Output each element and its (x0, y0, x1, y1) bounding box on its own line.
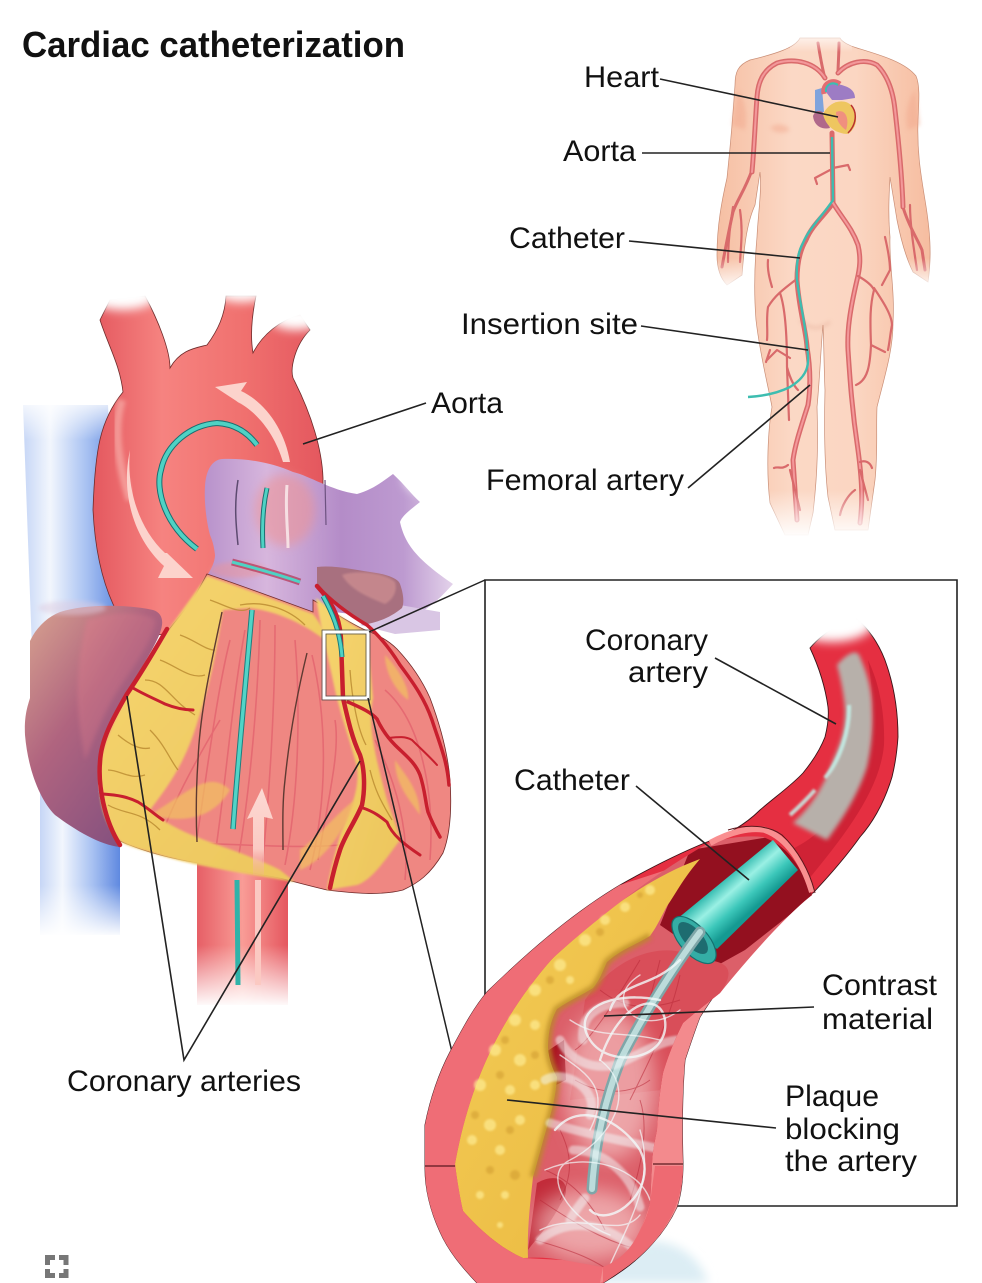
arterial tree (722, 43, 925, 523)
plaque blobs (467, 885, 655, 1228)
label: plaque: blocking (785, 1113, 900, 1146)
branch fades (88, 278, 322, 330)
near wall band (425, 859, 700, 1283)
label: contrast material: material (822, 1003, 933, 1036)
label: catheter: Catheter (509, 222, 625, 255)
icon: expand (48, 1258, 66, 1276)
body silhouette (717, 38, 930, 535)
body labels (461, 61, 684, 497)
body figure (712, 30, 935, 538)
aortic arch (93, 296, 323, 640)
arch highlight (117, 400, 130, 500)
vena cava lower (40, 790, 120, 935)
pulmonary blush (255, 474, 315, 546)
atrium highlight (78, 613, 155, 760)
fat patches on right muscle (150, 655, 420, 870)
coronary arteries (100, 586, 449, 888)
dark muscle lines (196, 612, 307, 850)
selection box on heart (322, 630, 370, 700)
body leader lines (629, 79, 838, 488)
contrast smoke outside artery (590, 1241, 708, 1283)
left atrial appendage (317, 567, 403, 625)
inset leader lines (507, 658, 836, 1128)
body shading (732, 90, 920, 328)
inset: artery cutaway (425, 602, 898, 1283)
catheter on ventricle (233, 610, 252, 829)
pale purple behind appendage (360, 605, 440, 634)
body fade at legs (755, 490, 885, 538)
muscle streaks (150, 620, 431, 880)
label: plaque: the artery (785, 1145, 917, 1178)
inset labels (514, 624, 938, 1178)
large heart (15, 278, 453, 1007)
fat deposits left (99, 576, 335, 882)
fat deposits right (316, 598, 400, 890)
vena cava upper (23, 405, 120, 650)
ventricle (98, 574, 451, 893)
label: plaque: Plaque (785, 1080, 879, 1113)
label: insertion site: Insertion site (461, 308, 638, 341)
catheter in body (748, 137, 833, 397)
dark red upper interior (660, 830, 815, 965)
title: Cardiac catheterization (22, 24, 405, 65)
grey upper lumen (793, 652, 872, 840)
label: contrast material (822, 969, 938, 1036)
label: coronary artery (585, 624, 708, 689)
up flow arrow (247, 788, 273, 875)
label: coronary artery: Coronary (585, 624, 708, 657)
label: coronary artery: artery (628, 656, 708, 689)
arm fades (712, 258, 747, 290)
catheter on left anterior artery (323, 596, 342, 657)
plaque inner shadow (533, 936, 650, 1177)
label: catheter: Catheter (514, 764, 630, 797)
lower wall shade (603, 1166, 683, 1283)
flow arrows in arch (127, 382, 290, 578)
small heart (813, 82, 856, 134)
plaque (455, 859, 700, 1258)
descending aorta (197, 840, 288, 1005)
label: heart: Heart (584, 61, 660, 94)
upper artery deeper red shading (790, 660, 884, 880)
label: contrast material: Contrast (822, 969, 938, 1002)
pulmonary artery (205, 459, 453, 620)
mid red tissue (570, 950, 729, 1100)
catheter in arch (159, 423, 257, 549)
label: plaque (785, 1080, 917, 1178)
lumen opening rim (710, 829, 812, 892)
atrium top blend into vein (38, 601, 106, 615)
body fade at top (790, 30, 852, 52)
label: femoral artery: Femoral artery (486, 464, 684, 497)
label: aorta: Aorta (431, 387, 503, 420)
pale contrast haze (565, 1010, 655, 1160)
outer wall (425, 619, 898, 1283)
right atrium (25, 606, 162, 847)
contrast swirls (540, 960, 680, 1265)
catheter (592, 840, 798, 1189)
tissue fibres (535, 960, 680, 1280)
far wall band (600, 893, 813, 1283)
label: aorta: Aorta (563, 135, 636, 168)
pulmonary end fades (404, 462, 452, 494)
upper fade (790, 602, 874, 642)
zoom connector and inset box (368, 580, 957, 1206)
fat lobes (108, 600, 392, 830)
label: coronary arteries: Coronary arteries (67, 1065, 301, 1098)
section line (425, 1164, 683, 1166)
large heart labels and leaders (67, 387, 503, 1098)
interior lumen (455, 836, 812, 1267)
